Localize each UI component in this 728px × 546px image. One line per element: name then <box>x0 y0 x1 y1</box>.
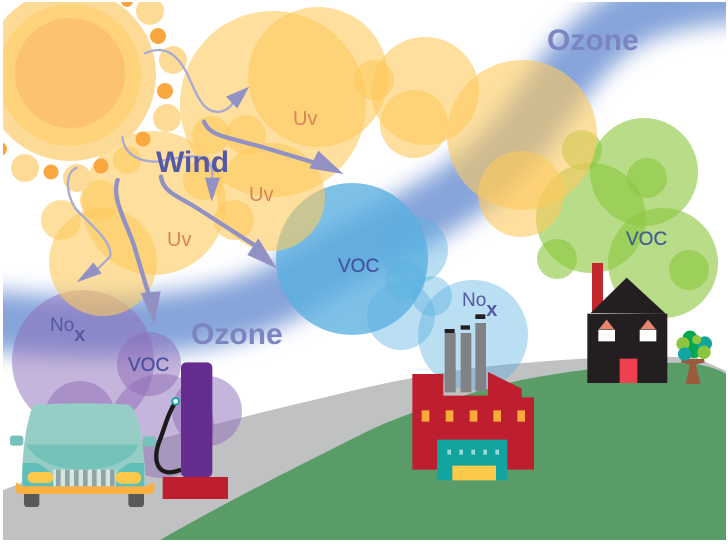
wind arrows <box>68 50 343 325</box>
blue VOC and NOx clouds <box>276 183 528 390</box>
label: ozone lower: Ozone <box>191 318 283 351</box>
yellow UV clouds <box>41 7 597 316</box>
green VOC clouds <box>536 118 718 318</box>
label: UV upper: Uv <box>293 108 317 130</box>
sun <box>0 0 187 192</box>
label: UV lower: Uv <box>167 229 191 251</box>
grass hill <box>160 363 726 540</box>
ozone band <box>0 0 728 326</box>
label: ozone upper: Ozone <box>547 24 639 57</box>
label: NOx at car: No <box>50 315 74 336</box>
car <box>10 403 156 507</box>
label: UV middle: Uv <box>249 184 273 206</box>
purple emission clouds <box>12 290 242 478</box>
road <box>3 357 726 540</box>
house <box>587 263 667 383</box>
label: VOC on trees: VOC <box>626 229 667 250</box>
gas pump <box>156 362 228 499</box>
small tree <box>676 331 712 384</box>
label: VOC on blue cloud: VOC <box>338 256 379 277</box>
label: NOx at car: x <box>74 324 85 346</box>
label: wind: Wind <box>156 146 229 179</box>
label: NOx at factory: x <box>486 299 497 321</box>
factory <box>412 314 534 480</box>
label: NOx at factory: No <box>462 290 486 311</box>
label: VOC at gas pump: VOC <box>128 355 169 376</box>
